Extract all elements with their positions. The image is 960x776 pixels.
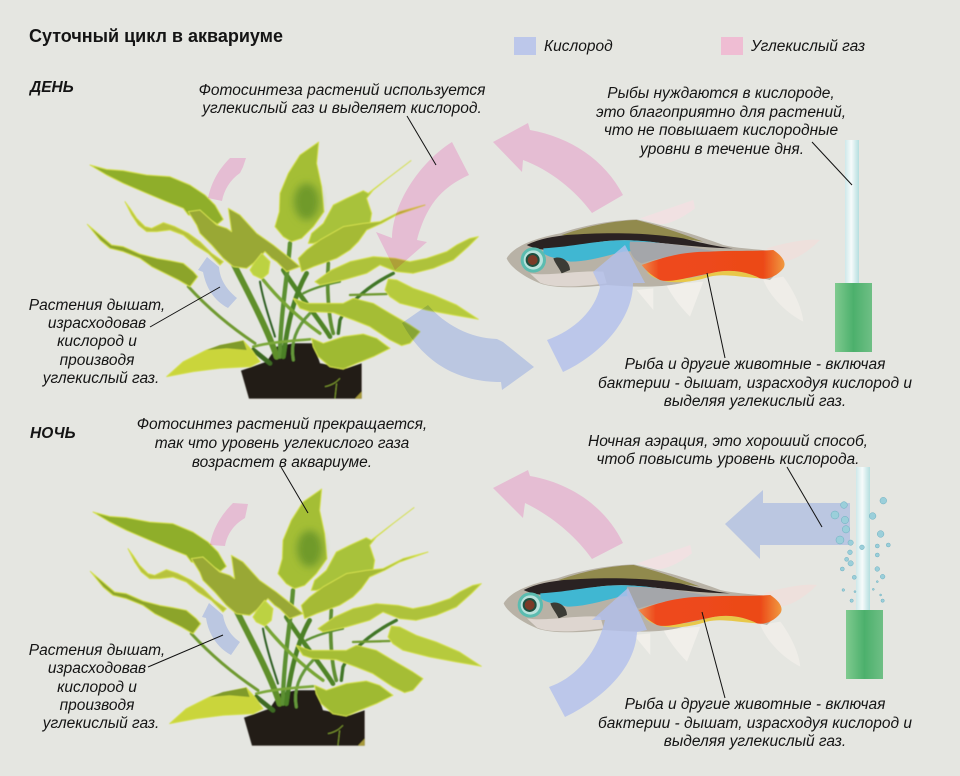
- callout: night photosynthesis stops: [137, 416, 427, 471]
- callout: night plant breathing: углекислый газ.: [42, 715, 159, 732]
- callout: night fish breathing: выделяя углекислый газ.: [664, 733, 846, 750]
- callout: day photosynthesis: Фотосинтеза растений используется: [199, 82, 485, 99]
- title: Суточный цикл в аквариуме: [29, 26, 283, 46]
- callout: night plant breathing: [29, 642, 165, 732]
- fish: day: [507, 200, 820, 322]
- callout: night photosynthesis stops: возрастет в аквариуме.: [192, 454, 372, 471]
- arrow: plant small O2 day: [198, 257, 237, 308]
- callout: day plant breathing: израсходовав: [48, 315, 146, 332]
- callout: day fish oxygen: [596, 85, 846, 158]
- callout: day plant breathing: производя: [60, 352, 134, 369]
- arrow: fish O2 day: [547, 245, 645, 372]
- callout: night plant breathing: производя: [60, 697, 134, 714]
- callout: night fish breathing: Рыба и другие животные - включая: [625, 696, 885, 713]
- callout: day plant breathing: Растения дышат,: [29, 297, 165, 314]
- callout: night photosynthesis stops: так что уровень углекислого газа: [155, 435, 410, 452]
- callout: day plant breathing: кислород и: [57, 333, 137, 350]
- plant: night: [90, 489, 481, 746]
- callout: day fish oxygen: что не повышает кислородные: [604, 122, 839, 139]
- callout: night plant breathing: Растения дышат,: [29, 642, 165, 659]
- arrow: plant small O2 night: [202, 603, 240, 655]
- callout: day fish breathing: Рыба и другие животные - включая: [625, 356, 885, 373]
- callout: day fish oxygen: Рыбы нуждаются в кислороде,: [607, 85, 835, 102]
- callout: day plant breathing: [29, 297, 165, 387]
- arrow: fish CO2 day: [493, 123, 623, 213]
- fish: night: [504, 545, 817, 667]
- callout: night fish breathing: [598, 696, 912, 750]
- callout: day fish oxygen: это благоприятно для растений,: [596, 104, 846, 121]
- callout: night aeration: Ночная аэрация, это хороший способ,: [588, 433, 868, 450]
- callout: day photosynthesis: углекислый газ и выделяет кислород.: [201, 100, 482, 117]
- legend: carbon dioxide: Углекислый газ: [750, 38, 865, 55]
- aerator with bubbles: night: [831, 467, 890, 679]
- callout: day photosynthesis: [199, 82, 485, 117]
- arrow: plant to fish O2 day: [402, 305, 534, 390]
- arrow: plant small CO2 night: [210, 503, 248, 546]
- callout: night plant breathing: израсходовав: [48, 660, 146, 677]
- legend: oxygen: [514, 37, 613, 55]
- arrow: plant small CO2 day: [208, 158, 246, 201]
- callout: day fish breathing: [598, 356, 912, 410]
- callout: night aeration: чтоб повысить уровень кислорода.: [597, 451, 859, 468]
- callout: day fish breathing: выделяя углекислый газ.: [664, 393, 846, 410]
- arrow: plant large CO2 day: [376, 142, 469, 270]
- callout: night aeration: [588, 433, 868, 468]
- heading: night: НОЧЬ: [30, 425, 76, 442]
- callout: day fish breathing: бактерии - дышат, израсходуя кислород и: [598, 375, 912, 392]
- leader lines: night: [148, 467, 822, 698]
- heading: day: ДЕНЬ: [28, 79, 74, 96]
- callout: night plant breathing: кислород и: [57, 679, 137, 696]
- callout: night photosynthesis stops: Фотосинтез растений прекращается,: [137, 416, 427, 433]
- callout: day plant breathing: углекислый газ.: [42, 370, 159, 387]
- plant: day: [87, 142, 478, 399]
- leader lines: day: [150, 116, 852, 358]
- callout: night fish breathing: бактерии - дышат, израсходуя кислород и: [598, 715, 912, 732]
- arrow: fish CO2 night: [493, 470, 623, 559]
- aerator tube: day: [835, 140, 872, 352]
- arrow: fish O2 night: [549, 588, 647, 717]
- legend: oxygen: Кислород: [544, 38, 613, 55]
- callout: day fish oxygen: уровни в течение дня.: [639, 141, 804, 158]
- arrow: aeration O2 night: [725, 490, 850, 559]
